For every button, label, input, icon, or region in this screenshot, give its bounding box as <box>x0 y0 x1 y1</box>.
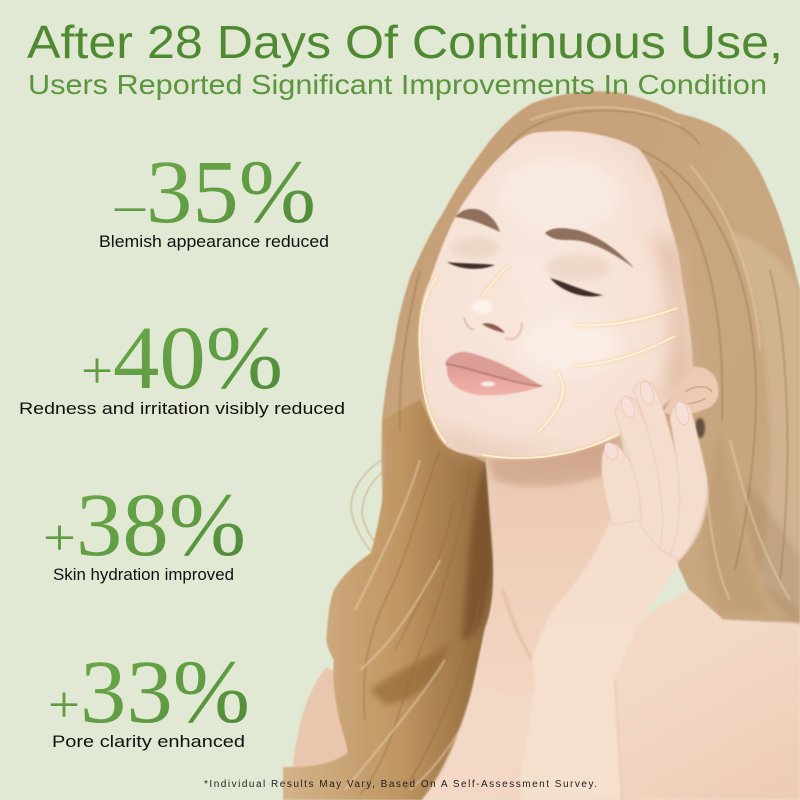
neck shadow <box>490 440 616 487</box>
glowing lift lines <box>420 266 677 458</box>
value: – <box>114 177 146 234</box>
title line 1: After 28 Days Of Continuous Use, <box>27 16 783 68</box>
footnote: *Individual Results May Vary, Based On A Self-Assessment Survey. <box>204 779 597 790</box>
stat: redness <box>19 309 345 418</box>
hair shadow near neck <box>462 463 493 640</box>
neck <box>476 432 640 694</box>
fingernails <box>602 380 691 462</box>
value: + <box>48 677 80 734</box>
arm shadow line <box>615 680 622 800</box>
caption: Redness and irritation visibly reduced <box>19 399 345 418</box>
value: 33% <box>80 643 250 742</box>
caption: Pore clarity enhanced <box>52 732 245 751</box>
value: + <box>43 510 76 567</box>
left shoulder <box>292 667 360 790</box>
arm and palm <box>520 480 708 800</box>
eyelids and lashes <box>447 237 610 296</box>
right hair light band <box>730 230 800 610</box>
value: + <box>81 343 113 400</box>
ear <box>663 367 719 415</box>
nose <box>463 270 523 340</box>
stat: pores <box>48 643 250 751</box>
hair mid shadow <box>370 640 450 705</box>
value: 38% <box>76 476 246 575</box>
neck tendon shadow <box>503 590 532 660</box>
facial soft shading <box>445 160 690 462</box>
hair <box>283 91 800 800</box>
lips <box>445 352 542 395</box>
title line 2: Users Reported Significant Improvements In Condition <box>28 69 767 100</box>
wispy loose strands <box>351 460 385 552</box>
stat: hydration <box>43 476 246 584</box>
hand fingers <box>602 381 707 560</box>
value: 40% <box>113 309 283 408</box>
face <box>418 131 693 459</box>
illustration: woman with closed eyes touching her cheek <box>283 91 800 800</box>
value: 35% <box>146 143 316 242</box>
stat: blemish <box>99 143 329 251</box>
eyebrows <box>455 209 634 268</box>
torso <box>422 590 800 800</box>
caption: Skin hydration improved <box>53 565 234 584</box>
hair strands <box>360 111 787 795</box>
caption: Blemish appearance reduced <box>99 232 329 251</box>
title <box>27 16 783 100</box>
dark gap behind hand <box>695 418 705 438</box>
